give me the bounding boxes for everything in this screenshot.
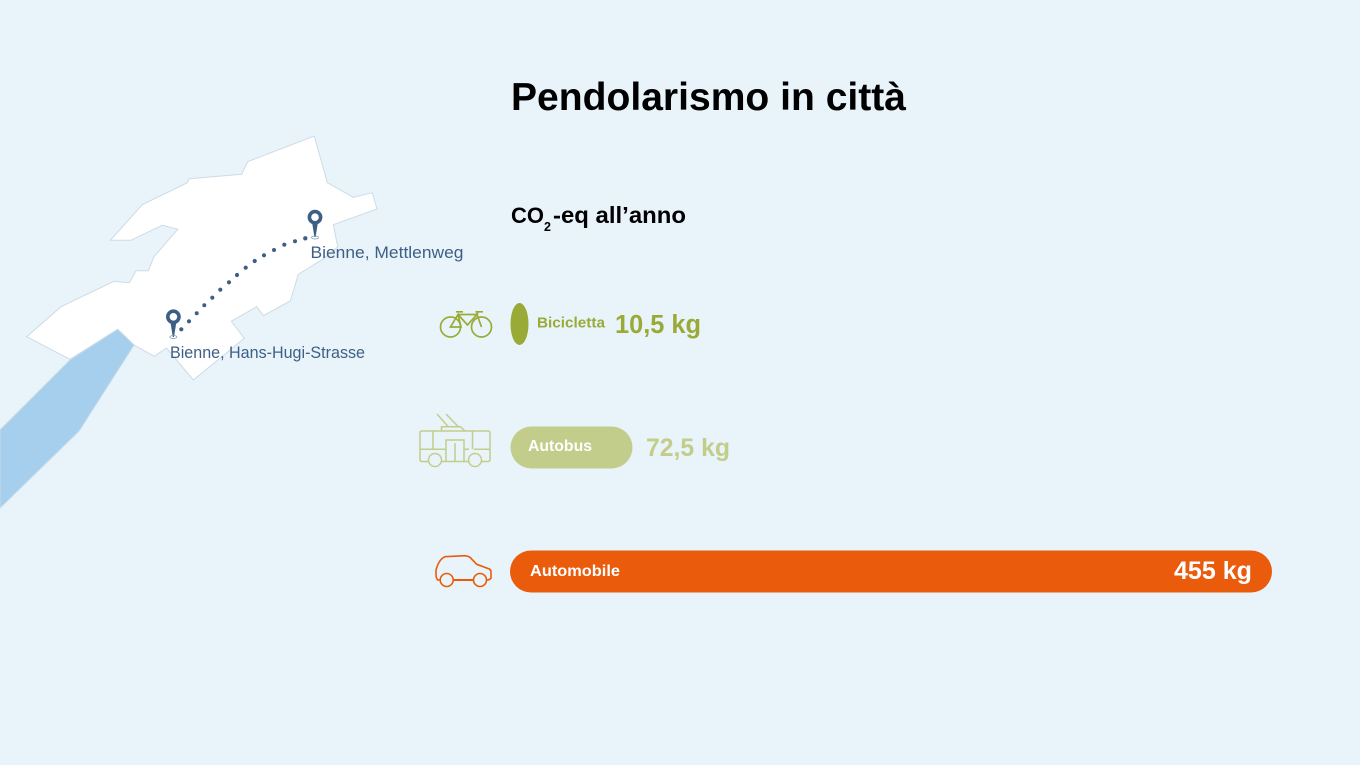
subtitle: CO [511, 203, 544, 228]
row: autobus [420, 414, 730, 468]
subtitle: -eq all’anno [553, 202, 686, 228]
row: automobile [436, 550, 1272, 592]
icon: trolleybus [420, 414, 490, 466]
label: Autobus: Autobus [528, 438, 592, 455]
bar: bicicletta [510, 303, 528, 345]
row: bicicletta [440, 303, 701, 345]
label: Bicicletta: Bicicletta [537, 314, 606, 332]
lake [0, 329, 134, 508]
subtitle: 2 [544, 220, 551, 234]
icon: car [436, 556, 491, 586]
value: 72,5 kg: 72,5 kg [646, 434, 730, 462]
label: Bienne, Hans-Hugi-Strasse: Bienne, Hans-Hugi-Strasse [170, 344, 365, 362]
title: Pendolarismo in città [511, 76, 906, 119]
label: Automobile: Automobile [530, 563, 620, 580]
bar: autobus [510, 426, 632, 468]
label: Bienne, Mettlenweg: Bienne, Mettlenweg [310, 244, 464, 262]
pin: Hans-Hugi-Strasse [168, 311, 179, 338]
subtitle [511, 202, 686, 234]
value: 455 kg: 455 kg [1174, 557, 1252, 585]
pin: Mettlenweg [309, 212, 321, 239]
icon: bicycle [440, 312, 492, 337]
bar: automobile [510, 550, 1272, 592]
city area [27, 136, 377, 380]
value: 10,5 kg: 10,5 kg [615, 311, 701, 339]
dotted route [179, 236, 307, 331]
map: Bienne [0, 136, 464, 508]
